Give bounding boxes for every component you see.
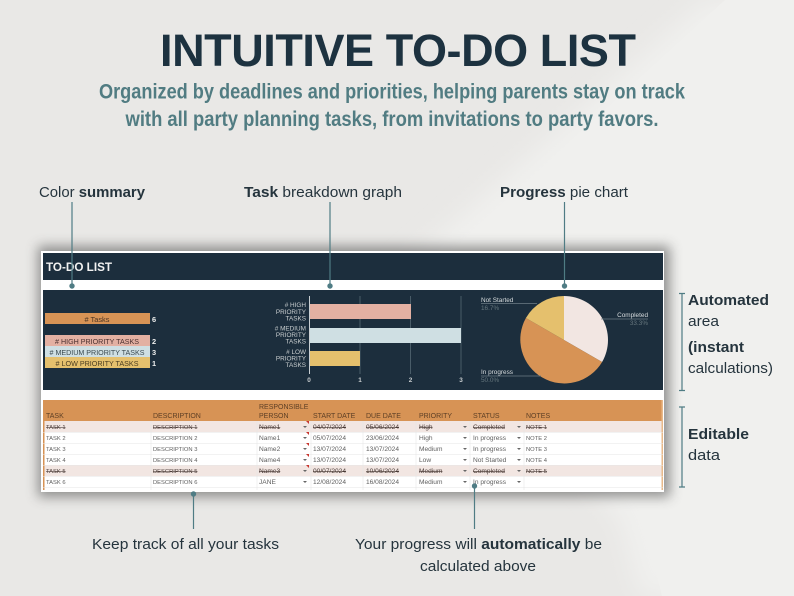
bar chart: TASKS xyxy=(286,316,306,322)
table rows: Name1 xyxy=(259,435,281,442)
table header: PRIORITY xyxy=(419,413,452,420)
table rows: Name4 xyxy=(259,457,281,464)
color summary: 2 xyxy=(152,337,156,346)
bar chart: TASKS xyxy=(286,338,306,346)
table rows: TASK 3 xyxy=(46,447,66,453)
sheet title bar xyxy=(43,253,663,280)
text: keep track: Keep track of all your tasks xyxy=(92,536,279,553)
bar chart: 0 xyxy=(307,377,311,384)
table rows: In progress xyxy=(473,479,507,486)
table rows: 05/07/2024 xyxy=(313,435,346,442)
table rows: Not Started xyxy=(473,457,507,464)
table rows: DESCRIPTION 3 xyxy=(153,447,197,453)
color summary: 3 xyxy=(152,348,156,357)
table rows: TASK 4 xyxy=(46,458,66,464)
text: automated area xyxy=(688,292,773,377)
subtitle: with all party planning tasks, from invitations to party favors. xyxy=(125,108,658,131)
bar chart: 2 xyxy=(409,377,413,384)
text: editable data xyxy=(688,426,749,464)
spreadsheet panel xyxy=(41,251,664,492)
bar chart: PRIORITY xyxy=(276,356,307,362)
color summary: 6 xyxy=(152,315,156,324)
color summary: # MEDIUM PRIORITY TASKS xyxy=(50,348,145,357)
color summary: # Tasks xyxy=(85,315,110,324)
table header: DUE DATE xyxy=(366,413,401,420)
table rows: Name2 xyxy=(259,446,281,453)
table rows: NOTE 1 xyxy=(526,425,547,431)
table header: START DATE xyxy=(313,413,356,420)
bracket: automated area xyxy=(679,294,685,390)
pie chart: In progress xyxy=(481,369,513,376)
text: progress calculated xyxy=(355,536,602,575)
text: progress calculated: Your progress will automatically be xyxy=(355,536,602,553)
table rows: 13/07/2024 xyxy=(366,446,399,453)
title: INTUITIVE TO-DO LIST xyxy=(160,25,636,76)
color summary: 1 xyxy=(152,359,156,368)
table rows: High xyxy=(419,435,433,442)
subtitle xyxy=(99,80,685,131)
table rows: DESCRIPTION 1 xyxy=(153,425,197,431)
table rows: Name1 xyxy=(259,424,281,431)
pointer: progress calculated xyxy=(472,483,477,529)
text: progress calculated: calculated above xyxy=(420,558,536,575)
table rows: Medium xyxy=(419,479,443,486)
table rows: 00/07/2024 xyxy=(313,468,346,475)
table rows: 16/08/2024 xyxy=(366,479,399,486)
subtitle: Organized by deadlines and priorities, helping parents stay on track xyxy=(99,80,685,104)
pie chart xyxy=(481,296,648,384)
table rows: TASK 1 xyxy=(46,425,66,431)
table rows: Name3 xyxy=(259,468,281,475)
pointer: task breakdown xyxy=(327,202,333,289)
label: task breakdown graph: Task breakdown graph xyxy=(244,184,402,201)
table header: DESCRIPTION xyxy=(153,413,201,420)
comment markers xyxy=(306,421,309,468)
table rows: 05/06/2024 xyxy=(366,424,399,431)
table rows: DESCRIPTION 6 xyxy=(153,480,197,486)
color summary xyxy=(45,313,156,368)
dropdown arrows xyxy=(303,426,521,483)
table rows: JANE xyxy=(259,479,276,486)
dashboard panel xyxy=(43,290,663,390)
bar chart: # LOW xyxy=(286,349,307,356)
table rows: Medium xyxy=(419,446,443,453)
pie chart: Not Started xyxy=(481,297,514,304)
table rows: High xyxy=(419,424,433,431)
label: progress pie chart: Progress pie chart xyxy=(500,184,629,201)
table rows: NOTE 4 xyxy=(526,458,548,464)
bar chart xyxy=(275,296,463,384)
table rows: 13/07/2024 xyxy=(366,457,399,464)
pie chart: 16.7% xyxy=(481,305,499,312)
sheet shadow xyxy=(38,246,670,497)
color summary: # LOW PRIORITY TASKS xyxy=(56,359,139,368)
table header: STATUS xyxy=(473,413,500,420)
data table xyxy=(43,400,663,490)
table rows: In progress xyxy=(473,435,507,442)
table rows: TASK 5 xyxy=(46,469,66,475)
table rows: DESCRIPTION 4 xyxy=(153,458,198,464)
table header: PERSON xyxy=(259,413,289,420)
table header: RESPONSIBLE xyxy=(259,404,309,411)
table header: NOTES xyxy=(526,413,550,420)
table rows: NOTE 3 xyxy=(526,447,547,453)
pointer: color summary xyxy=(69,202,75,289)
table rows: Low xyxy=(419,457,431,464)
text: automated area: Automated xyxy=(688,292,769,309)
text: automated area: calculations) xyxy=(688,360,773,377)
text: automated area: (instant xyxy=(688,339,744,356)
text: editable data: Editable xyxy=(688,426,749,443)
table rows: TASK 2 xyxy=(46,436,66,442)
text: automated area: area xyxy=(688,313,720,330)
bracket: editable data xyxy=(679,407,685,487)
bar chart: # HIGH xyxy=(285,302,306,309)
table rows: 13/07/2024 xyxy=(313,446,346,453)
table rows: 10/06/2024 xyxy=(366,468,399,475)
table rows: TASK 6 xyxy=(46,480,66,486)
pie chart: 33.3% xyxy=(630,320,648,327)
table rows: DESCRIPTION 2 xyxy=(153,436,197,442)
table rows: 23/06/2024 xyxy=(366,435,399,442)
table rows xyxy=(46,424,548,486)
label: color summary: Color summary xyxy=(39,184,146,201)
table rows: In progress xyxy=(473,446,507,453)
table rows: 04/07/2024 xyxy=(313,424,346,431)
pointer: progress pie xyxy=(562,202,567,289)
table header xyxy=(46,404,550,420)
table rows: DESCRIPTION 5 xyxy=(153,469,197,475)
table rows: NOTE 2 xyxy=(526,436,547,442)
sheet title bar: TO-DO LIST xyxy=(46,262,112,274)
pointer: track tasks xyxy=(191,491,196,529)
table rows: 13/07/2024 xyxy=(313,457,346,464)
color summary: # HIGH PRIORITY TASKS xyxy=(55,337,139,346)
table rows: 12/08/2024 xyxy=(313,479,346,486)
pie chart: 50.0% xyxy=(481,377,499,384)
bar chart: TASKS xyxy=(286,362,306,369)
bar chart: PRIORITY xyxy=(276,332,307,339)
bar chart: 1 xyxy=(358,377,362,384)
table rows: NOTE 5 xyxy=(526,469,547,475)
bar chart: # MEDIUM xyxy=(275,326,306,332)
table rows: Medium xyxy=(419,468,443,475)
table header: TASK xyxy=(46,413,64,420)
bar chart: PRIORITY xyxy=(276,309,307,316)
table rows: Completed xyxy=(473,424,505,431)
bar chart: 3 xyxy=(459,377,463,384)
pie chart: Completed xyxy=(617,312,648,319)
text: editable data: data xyxy=(688,447,721,464)
table rows: Completed xyxy=(473,468,505,475)
